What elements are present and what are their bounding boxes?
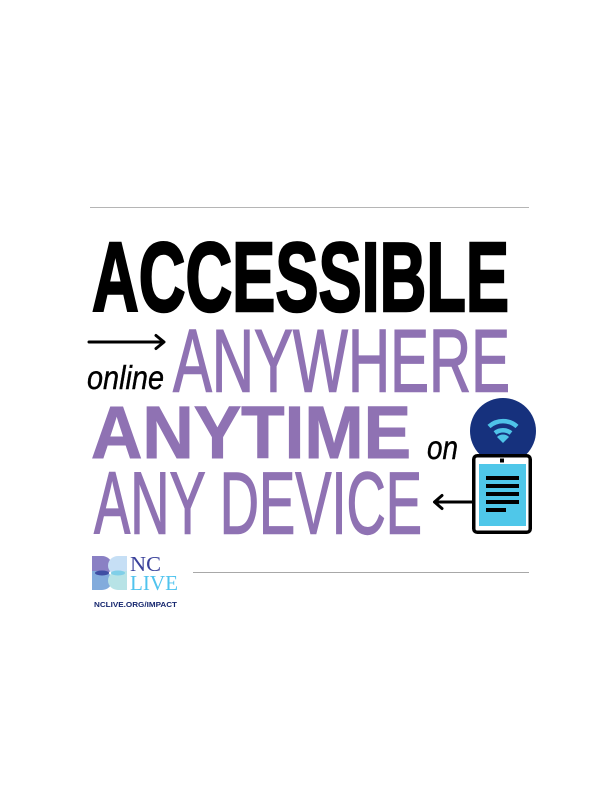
icon: wifi badge [470, 398, 536, 464]
tablet text lines [486, 476, 519, 512]
logo mark [92, 556, 127, 590]
logo wordmark: LIVE [130, 571, 178, 595]
arrow: online [89, 336, 164, 348]
label: on: on [427, 429, 458, 466]
headline: any device: ANY DEVICE [94, 454, 422, 552]
label: online: online [87, 359, 164, 396]
logo wordmark [130, 552, 178, 595]
logo url: NCLIVE.ORG/IMPACT [94, 600, 177, 609]
icon: tablet [474, 456, 530, 532]
logo wordmark: NC [130, 552, 161, 576]
logo: NC LIVE [92, 552, 178, 609]
headline: anytime: ANYTIME [91, 391, 411, 474]
arrow: device [434, 496, 473, 508]
